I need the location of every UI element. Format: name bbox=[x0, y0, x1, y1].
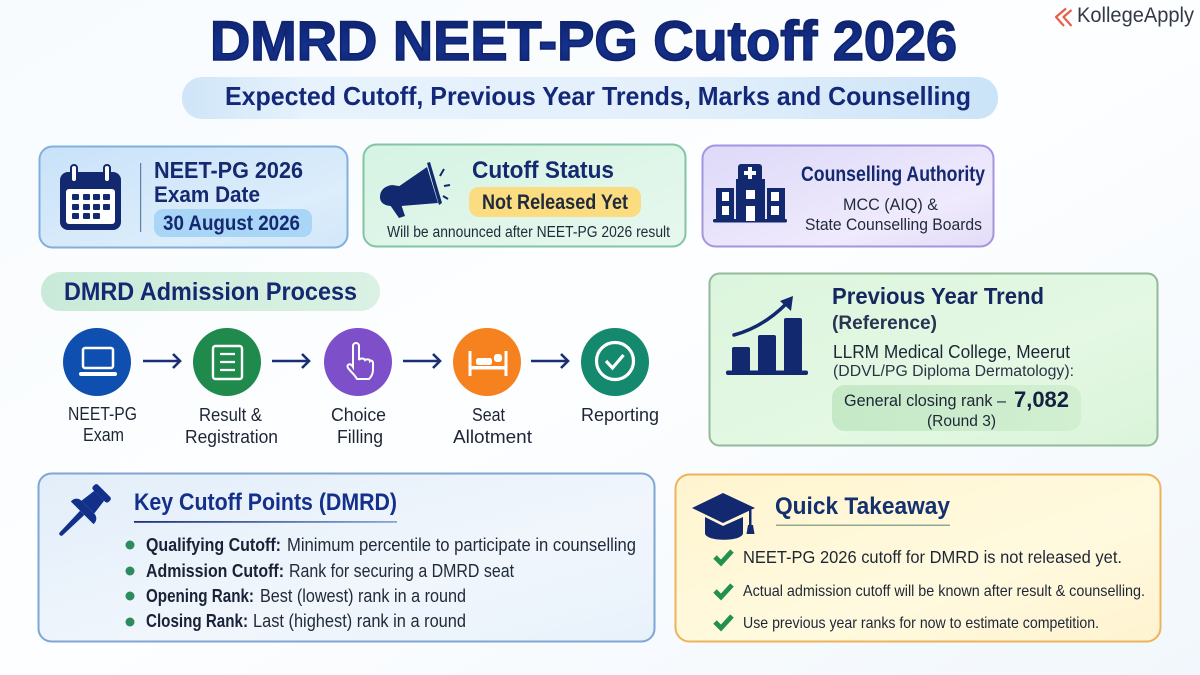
point: admission cutoff: Admission Cutoff: bbox=[146, 561, 284, 581]
exam heading: NEET-PG 2026 bbox=[154, 157, 303, 183]
icon: push pin bbox=[49, 480, 115, 546]
point: qualifying cutoff: Qualifying Cutoff: bbox=[146, 535, 281, 555]
icon: logo chevrons bbox=[1056, 8, 1072, 26]
heading: admission process bbox=[41, 272, 380, 311]
step: choice filling bbox=[324, 328, 392, 447]
step: result and registration: Registration bbox=[185, 427, 278, 447]
closing rank pill: (Round 3) bbox=[927, 413, 996, 430]
icon: hospital bbox=[713, 164, 787, 222]
icon: graduation cap bbox=[692, 493, 755, 540]
point: opening rank: Opening Rank: bbox=[146, 586, 254, 606]
point: closing rank: Last (highest) rank in a round bbox=[253, 611, 466, 631]
point: admission cutoff bbox=[126, 561, 514, 581]
key points heading: Key Cutoff Points (DMRD) bbox=[134, 489, 397, 516]
step: reporting: Reporting bbox=[581, 405, 659, 425]
step: result and registration: Result & bbox=[199, 405, 262, 425]
status note: Will be announced after NEET-PG 2026 result bbox=[387, 224, 671, 241]
panel: previous year trend bbox=[710, 274, 1158, 446]
process flow bbox=[63, 328, 659, 447]
point: qualifying cutoff: Minimum percentile to participate in counselling bbox=[287, 535, 636, 555]
arrow 1 bbox=[143, 354, 180, 368]
panel: key cutoff points bbox=[38, 474, 654, 642]
point: opening rank bbox=[126, 586, 466, 606]
step: seat allotment bbox=[453, 328, 532, 447]
step: choice filling: Filling bbox=[337, 427, 383, 447]
closing rank pill: 7,082 bbox=[1014, 387, 1069, 412]
point: closing rank: Closing Rank: bbox=[146, 611, 248, 631]
step: NEET-PG exam: NEET-PG bbox=[68, 404, 137, 424]
trend subheading: (Reference) bbox=[832, 313, 937, 334]
icon: rising bar chart bbox=[726, 296, 808, 375]
takeaway 1: NEET-PG 2026 cutoff for DMRD is not released yet. bbox=[743, 547, 1122, 567]
authority text line 2: State Counselling Boards bbox=[805, 215, 982, 234]
status heading: Cutoff Status bbox=[472, 157, 614, 184]
takeaway 2: Actual admission cutoff will be known after result & counselling. bbox=[743, 583, 1145, 600]
panel: quick takeaway bbox=[676, 474, 1160, 642]
heading: admission process: DMRD Admission Process bbox=[64, 278, 357, 306]
logo: KollegeApply bbox=[1056, 4, 1194, 27]
panel: counselling authority bbox=[702, 146, 994, 246]
step: seat allotment: Seat bbox=[472, 405, 505, 425]
step: seat allotment: Allotment bbox=[453, 427, 532, 447]
closing rank pill: General closing rank – bbox=[844, 391, 1007, 410]
icon: calendar bbox=[60, 165, 121, 230]
step: choice filling: Choice bbox=[331, 405, 386, 425]
exam heading second line: Exam Date bbox=[154, 182, 260, 207]
point: opening rank: Best (lowest) rank in a round bbox=[260, 586, 466, 606]
college name: LLRM Medical College, Meerut bbox=[833, 342, 1070, 362]
step: result and registration bbox=[185, 328, 278, 447]
date pill: 30 August 2026 bbox=[163, 212, 300, 235]
course name: (DDVL/PG Diploma Dermatology): bbox=[833, 363, 1074, 380]
subtitle banner bbox=[182, 77, 998, 119]
subtitle text: Expected Cutoff, Previous Year Trends, Marks and Counselling bbox=[225, 81, 971, 111]
arrow 2 bbox=[272, 354, 309, 368]
point: closing rank bbox=[126, 611, 466, 631]
panel: cutoff status bbox=[364, 144, 686, 246]
takeaway 3: Use previous year ranks for now to estimate competition. bbox=[743, 615, 1099, 632]
logo wordmark: KollegeApply bbox=[1077, 4, 1194, 27]
point: admission cutoff: Rank for securing a DMRD seat bbox=[289, 561, 514, 581]
title: DMRD NEET-PG Cutoff 2026 bbox=[210, 9, 957, 72]
panel: exam date bbox=[40, 146, 348, 248]
takeaway heading: Quick Takeaway bbox=[775, 493, 951, 520]
closing rank pill bbox=[832, 385, 1081, 431]
trend heading: Previous Year Trend bbox=[832, 283, 1044, 309]
step: reporting bbox=[581, 328, 659, 425]
authority heading: Counselling Authority bbox=[801, 162, 985, 186]
authority text line 1: MCC (AIQ) & bbox=[843, 195, 939, 214]
point: qualifying cutoff bbox=[126, 535, 636, 555]
step: NEET-PG exam: Exam bbox=[83, 425, 124, 445]
status pill bbox=[469, 187, 641, 217]
icon: megaphone bbox=[380, 162, 450, 218]
status pill: Not Released Yet bbox=[482, 191, 628, 214]
arrow 3 bbox=[403, 354, 440, 368]
step: NEET-PG exam bbox=[63, 328, 137, 445]
arrow 4 bbox=[531, 354, 568, 368]
